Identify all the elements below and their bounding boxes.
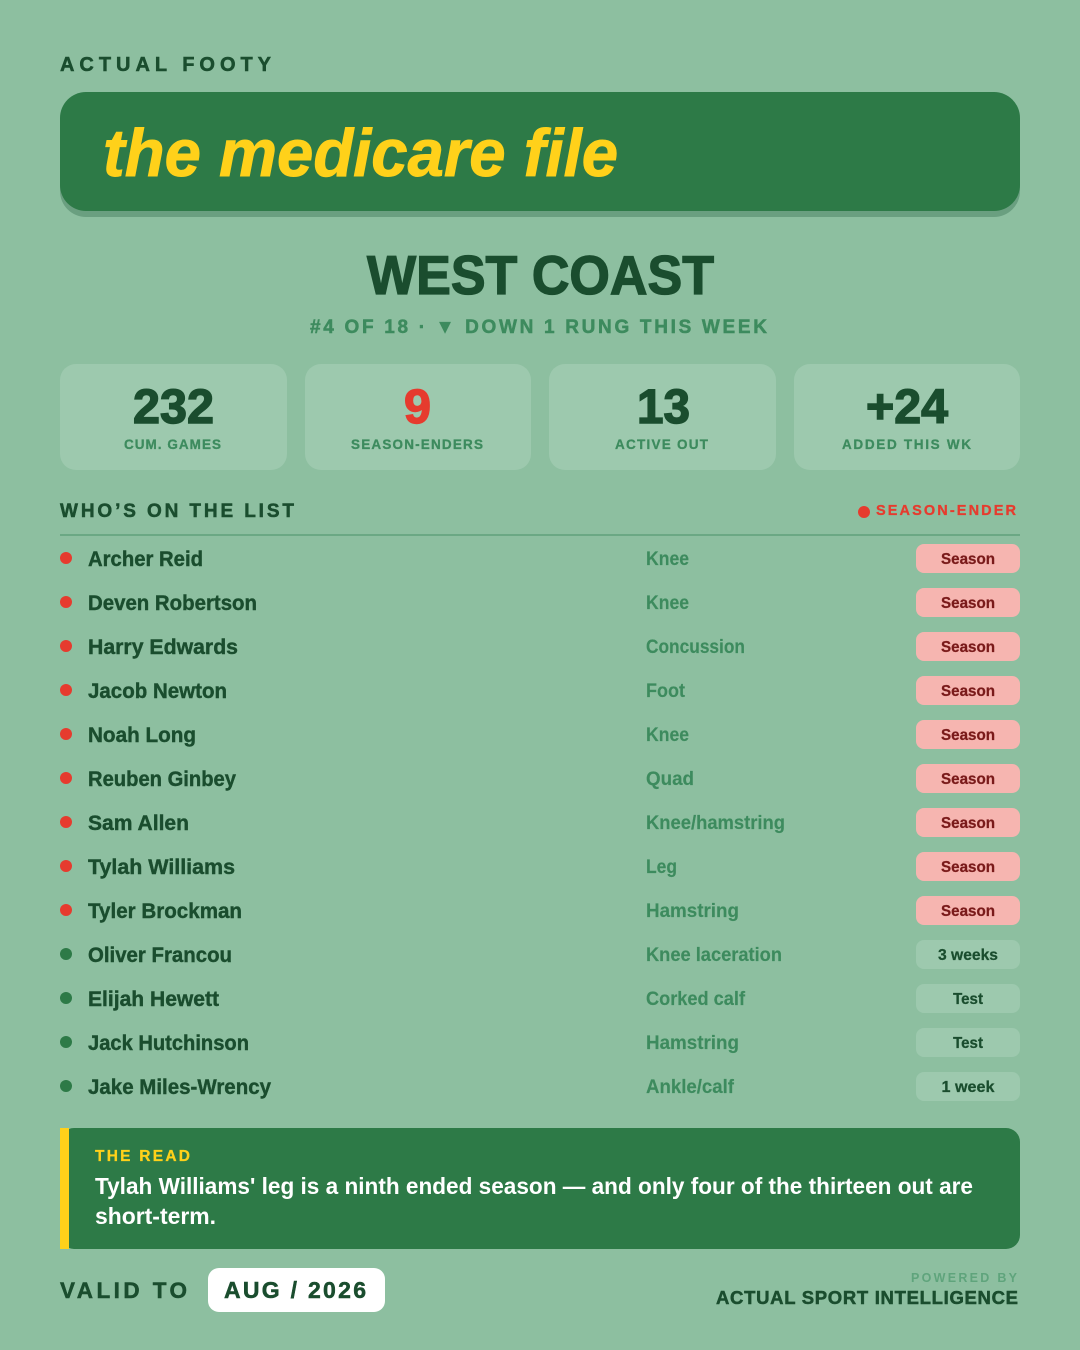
panel: cumulative games <box>60 364 287 470</box>
row: Elijah Hewett <box>60 984 1020 1013</box>
team name: WEST COAST <box>367 244 714 306</box>
title: the medicare file <box>103 116 618 191</box>
panel: added this week: +24 <box>866 381 948 434</box>
row: Jake Miles-Wrency: 1 week <box>942 1079 995 1096</box>
row: Deven Robertson: Deven Robertson <box>88 592 257 615</box>
row: Tyler Brockman: Hamstring <box>646 900 739 922</box>
row: Jacob Newton: Jacob Newton <box>88 680 227 703</box>
callout: the read: short-term. <box>95 1203 216 1229</box>
row: Oliver Francou: 3 weeks <box>938 947 998 964</box>
row: Jack Hutchinson: Hamstring <box>646 1032 739 1054</box>
row: Oliver Francou <box>60 940 1020 969</box>
callout: the read: Tylah Williams' leg is a ninth ended season — and only four of the thirteen out are <box>95 1173 973 1199</box>
row: Noah Long: Season <box>941 727 995 744</box>
row: Archer Reid: Knee <box>646 548 689 570</box>
powered by credit: POWERED BY <box>911 1271 1018 1285</box>
valid date pill: AUG / 2026 <box>224 1277 366 1303</box>
panel: added this week <box>794 364 1020 470</box>
row: Sam Allen: Season <box>941 815 995 832</box>
valid to label: VALID TO <box>60 1278 187 1303</box>
brand label: ACTUAL FOOTY <box>60 54 272 76</box>
valid date pill <box>208 1268 385 1312</box>
row: Deven Robertson: Season <box>941 595 995 612</box>
list heading: WHO’S ON THE LIST <box>60 501 294 522</box>
row: Archer Reid: Season <box>941 551 995 568</box>
callout: the read <box>60 1128 1020 1249</box>
row: Elijah Hewett: Corked calf <box>646 988 745 1010</box>
row: Tyler Brockman: Tyler Brockman <box>88 900 242 923</box>
powered by credit: ACTUAL SPORT INTELLIGENCE <box>716 1287 1018 1308</box>
row: Elijah Hewett: Test <box>953 991 983 1008</box>
panel: active out: ACTIVE OUT <box>615 437 709 452</box>
row: Jake Miles-Wrency: Jake Miles-Wrency <box>88 1076 271 1099</box>
row: Jacob Newton: Season <box>941 683 995 700</box>
injury list <box>60 544 1020 1101</box>
row: Oliver Francou: Knee laceration <box>646 944 782 966</box>
row: Archer Reid: Archer Reid <box>88 548 203 571</box>
row: Oliver Francou: Oliver Francou <box>88 944 232 967</box>
panel: active out <box>549 364 776 470</box>
row: Jack Hutchinson: Jack Hutchinson <box>88 1032 249 1055</box>
row: Jake Miles-Wrency: Ankle/calf <box>646 1076 734 1098</box>
title banner <box>60 92 1020 217</box>
row: Tylah Williams <box>60 852 1020 881</box>
row: Jack Hutchinson: Test <box>953 1035 983 1052</box>
callout: the read: THE READ <box>95 1148 190 1165</box>
row: Reuben Ginbey: Reuben Ginbey <box>88 768 236 791</box>
row: Sam Allen: Knee/hamstring <box>646 812 785 834</box>
row: Tylah Williams: Tylah Williams <box>88 856 235 879</box>
panel: added this week: ADDED THIS WK <box>842 437 971 452</box>
row: Harry Edwards <box>60 632 1020 661</box>
row: Tyler Brockman: Season <box>941 903 995 920</box>
panel: season-enders: SEASON-ENDERS <box>351 437 483 452</box>
row: Deven Robertson: Knee <box>646 592 689 614</box>
row: Reuben Ginbey: Season <box>941 771 995 788</box>
row: Deven Robertson <box>60 588 1020 617</box>
panel: season-enders: 9 <box>404 381 431 434</box>
panel: cumulative games: CUM. GAMES <box>124 437 221 452</box>
row: Noah Long <box>60 720 1020 749</box>
row: Tyler Brockman <box>60 896 1020 925</box>
panel: cumulative games: 232 <box>133 381 214 434</box>
legend: season-ender: SEASON-ENDER <box>876 503 1017 519</box>
row: Harry Edwards: Harry Edwards <box>88 636 238 659</box>
row: Sam Allen <box>60 808 1020 837</box>
row: Elijah Hewett: Elijah Hewett <box>88 988 219 1011</box>
ladder subtitle: #4 OF 18 · ▼ DOWN 1 RUNG THIS WEEK <box>310 317 767 338</box>
panel: active out: 13 <box>637 381 690 434</box>
row: Sam Allen: Sam Allen <box>88 812 189 835</box>
row: Tylah Williams: Leg <box>646 856 677 878</box>
panel: season-enders <box>305 364 531 470</box>
row: Tylah Williams: Season <box>941 859 995 876</box>
row: Jake Miles-Wrency <box>60 1072 1020 1101</box>
row: Reuben Ginbey: Quad <box>646 768 694 790</box>
row: Noah Long: Noah Long <box>88 724 196 747</box>
row: Reuben Ginbey <box>60 764 1020 793</box>
row: Jack Hutchinson <box>60 1028 1020 1057</box>
row: Archer Reid <box>60 544 1020 573</box>
row: Harry Edwards: Concussion <box>646 636 745 658</box>
row: Harry Edwards: Season <box>941 639 995 656</box>
powered by credit <box>716 1271 1018 1308</box>
row: Noah Long: Knee <box>646 724 689 746</box>
row: Jacob Newton <box>60 676 1020 705</box>
row: Jacob Newton: Foot <box>646 680 685 702</box>
